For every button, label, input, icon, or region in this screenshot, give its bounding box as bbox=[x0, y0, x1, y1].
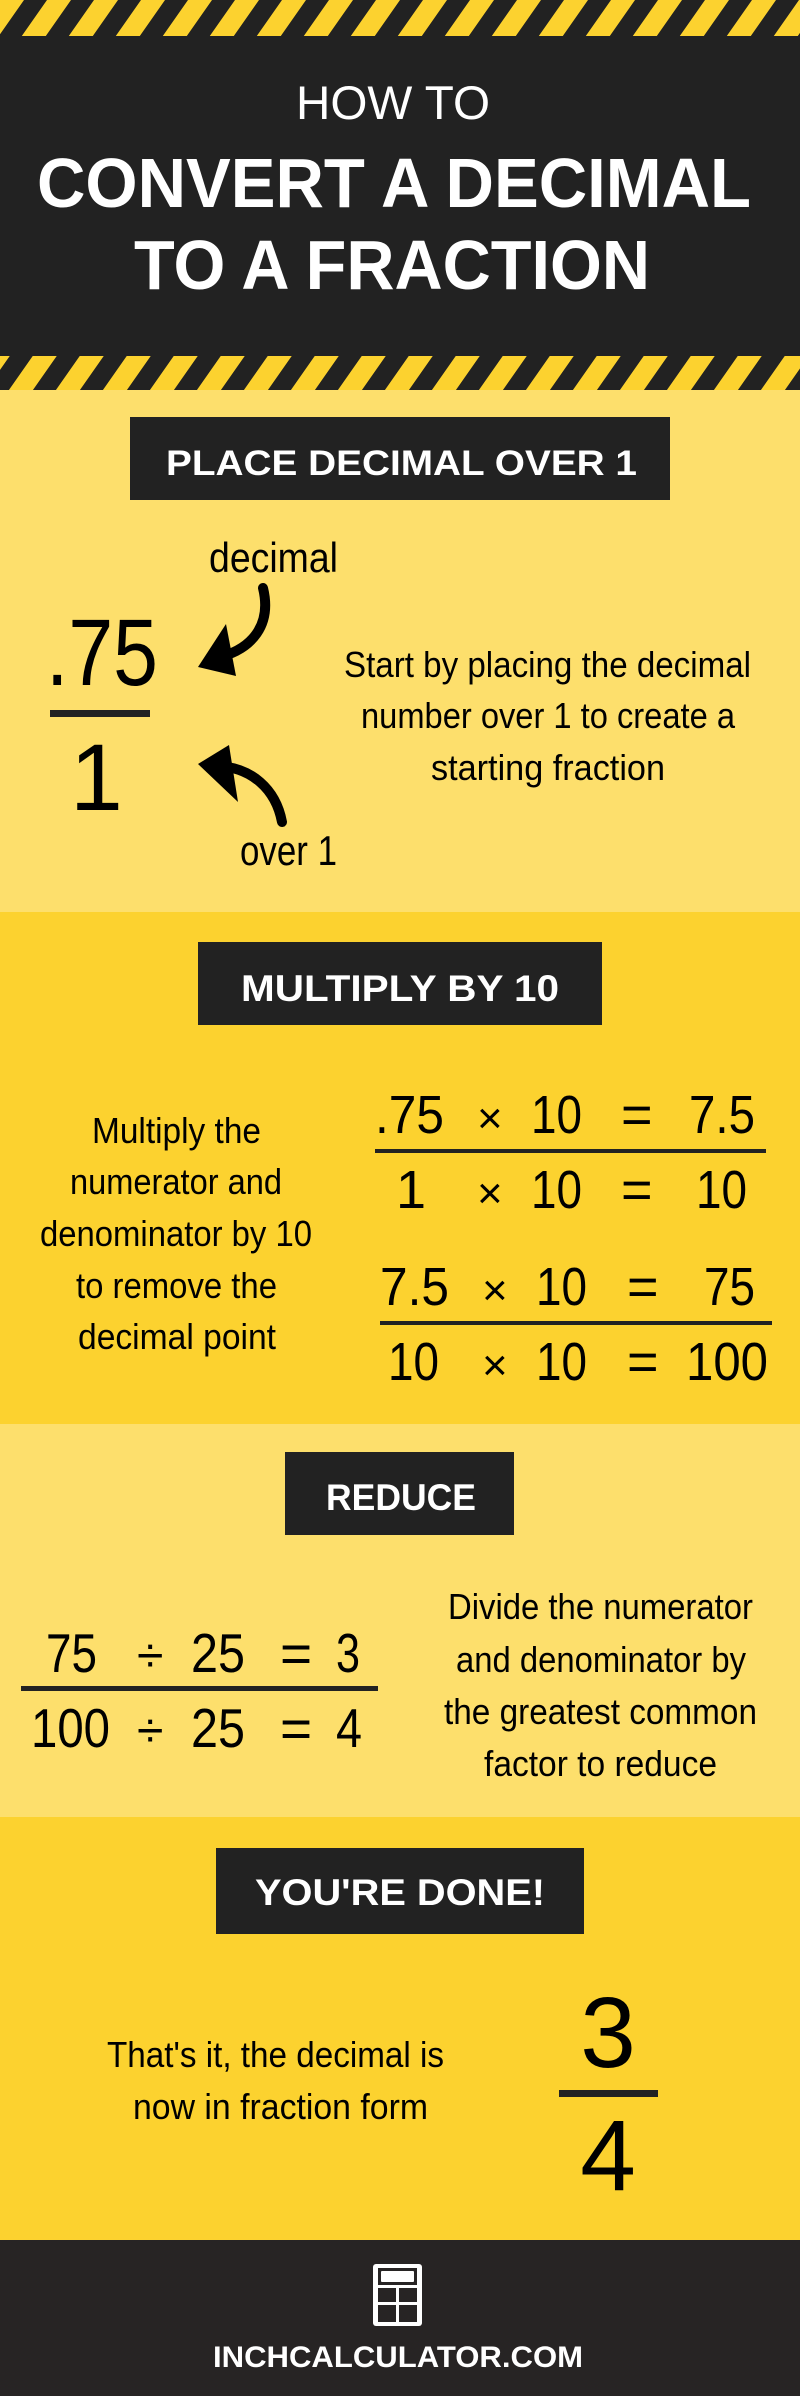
text: divide explanation bbox=[444, 1586, 757, 1784]
equation: reduce by 25: 25 bbox=[191, 1697, 245, 1759]
equation: 7.5/10 x 10: × bbox=[482, 1266, 508, 1315]
equation: 7.5/10 x 10: = bbox=[627, 1332, 659, 1392]
arrow: over 1 to denominator bbox=[198, 745, 282, 822]
text: multiply explanation: Multiply the bbox=[92, 1110, 261, 1151]
equation: .75/1 x 10: 10 bbox=[531, 1085, 582, 1145]
text: multiply explanation: numerator and bbox=[70, 1161, 282, 1202]
equation: reduce by 25: 75 bbox=[46, 1622, 97, 1684]
equation: .75/1 x 10: × bbox=[477, 1094, 503, 1143]
equation: 7.5/10 x 10: × bbox=[482, 1341, 508, 1390]
panel: multiply by 10 bbox=[0, 912, 800, 1424]
text: that's it bbox=[107, 2034, 444, 2127]
equation: reduce by 25: 25 bbox=[191, 1622, 245, 1684]
heading: place decimal over 1: PLACE DECIMAL OVER 1 bbox=[166, 444, 637, 483]
equation: reduce by 25: = bbox=[280, 1697, 312, 1759]
label: decimal: decimal bbox=[209, 534, 338, 581]
text: divide explanation: the greatest common bbox=[444, 1691, 757, 1732]
equation: reduce by 25: = bbox=[280, 1622, 312, 1684]
heading: you're done bbox=[216, 1848, 584, 1934]
text: divide explanation: Divide the numerator bbox=[448, 1586, 753, 1627]
equation: reduce by 25: 3 bbox=[336, 1622, 360, 1684]
heading: reduce: REDUCE bbox=[326, 1477, 476, 1518]
text: start by placing: number over 1 to create a bbox=[361, 695, 736, 736]
fraction: 3/4 bbox=[559, 1977, 658, 2212]
fraction: 3/4: 4 bbox=[580, 2100, 636, 2212]
text: start by placing: Start by placing the decimal bbox=[344, 644, 751, 685]
text: divide explanation: and denominator by bbox=[456, 1639, 746, 1680]
footer text: INCHCALCULATOR.COM bbox=[213, 2341, 583, 2374]
text: start by placing: starting fraction bbox=[431, 747, 665, 788]
equation: reduce by 25 bbox=[21, 1622, 378, 1759]
equation: 7.5/10 x 10: 10 bbox=[536, 1332, 587, 1392]
title: HOW TO bbox=[296, 76, 490, 129]
text: multiply explanation: to remove the bbox=[76, 1265, 277, 1306]
equation: .75/1 x 10: 7.5 bbox=[689, 1085, 755, 1145]
equation: .75/1 x 10: 1 bbox=[396, 1160, 426, 1220]
arrow: decimal to numerator bbox=[198, 588, 265, 676]
heading: reduce bbox=[285, 1452, 514, 1535]
equation: 7.5/10 x 10 bbox=[380, 1257, 772, 1392]
heading: place decimal over 1 bbox=[130, 417, 670, 500]
heading: multiply by 10 bbox=[198, 942, 602, 1025]
header panel bbox=[0, 0, 800, 390]
fraction .75 over 1: .75 bbox=[46, 600, 158, 706]
panel: reduce bbox=[0, 1424, 800, 1817]
equation: 7.5/10 x 10: 10 bbox=[536, 1257, 587, 1317]
equation: 7.5/10 x 10: 7.5 bbox=[380, 1257, 449, 1317]
fraction .75 over 1: 1 bbox=[70, 725, 123, 831]
equation: .75/1 x 10: 10 bbox=[531, 1160, 582, 1220]
fraction: 3/4: 3 bbox=[580, 1977, 636, 2089]
text: that's it: That's it, the decimal is bbox=[107, 2034, 444, 2075]
equation: reduce by 25: ÷ bbox=[137, 1705, 163, 1758]
text: multiply explanation: decimal point bbox=[78, 1316, 276, 1357]
fraction .75 over 1 bbox=[46, 600, 158, 831]
equation: 7.5/10 x 10: 10 bbox=[388, 1332, 439, 1392]
equation: .75/1 x 10 bbox=[375, 1085, 766, 1220]
equation: .75/1 x 10: = bbox=[621, 1085, 653, 1145]
equation: .75/1 x 10: .75 bbox=[375, 1085, 444, 1145]
footer bbox=[0, 2240, 800, 2396]
panel: you're done bbox=[0, 1817, 800, 2240]
equation: .75/1 x 10: = bbox=[621, 1160, 653, 1220]
label: over 1: over 1 bbox=[240, 827, 337, 874]
equation: reduce by 25: 100 bbox=[31, 1697, 110, 1759]
title bbox=[37, 76, 751, 304]
title: TO A FRACTION bbox=[134, 226, 650, 304]
equation: .75/1 x 10: × bbox=[477, 1169, 503, 1218]
equation: reduce by 25: ÷ bbox=[137, 1630, 163, 1683]
title: CONVERT A DECIMAL bbox=[37, 144, 751, 222]
heading: multiply by 10: MULTIPLY BY 10 bbox=[241, 968, 559, 1009]
text: start by placing bbox=[344, 644, 751, 788]
equation: 7.5/10 x 10: = bbox=[627, 1257, 659, 1317]
text: multiply explanation bbox=[40, 1110, 312, 1357]
text: multiply explanation: denominator by 10 bbox=[40, 1213, 312, 1254]
equation: 7.5/10 x 10: 100 bbox=[686, 1332, 768, 1392]
equation: reduce by 25: 4 bbox=[336, 1697, 362, 1759]
equation: 7.5/10 x 10: 75 bbox=[704, 1257, 755, 1317]
icon: calculator bbox=[373, 2264, 422, 2326]
equation: .75/1 x 10: 10 bbox=[696, 1160, 747, 1220]
text: that's it: now in fraction form bbox=[133, 2086, 428, 2127]
text: divide explanation: factor to reduce bbox=[484, 1743, 717, 1784]
panel: place decimal over 1 bbox=[0, 390, 800, 912]
heading: you're done: YOU'RE DONE! bbox=[255, 1872, 545, 1913]
